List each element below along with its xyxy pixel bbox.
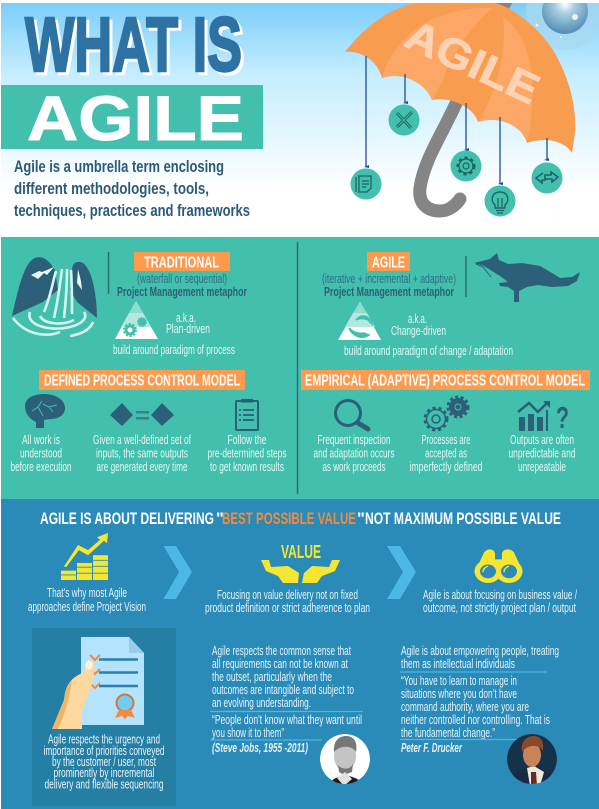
heading: best possible value: " — [357, 510, 365, 528]
hanging icon: tools — [388, 74, 420, 136]
text: agile subtitle: Project Management metaphor — [324, 285, 454, 299]
text: common sense column: the outset, particularly when the — [212, 670, 332, 684]
text: change-driven: build around paradigm of change / adaptation — [344, 344, 513, 358]
banner: defined process — [39, 370, 245, 390]
text: business value — [423, 588, 577, 615]
icon: value hands: VALUE — [281, 542, 321, 562]
text: common sense column: Agile respects the common sense that — [212, 644, 351, 658]
intro text: Agile is a umbrella term enclosing — [14, 157, 224, 176]
text: frequent inspection — [314, 433, 394, 474]
hanging icon: gear — [450, 103, 482, 182]
text: value delivery — [205, 588, 370, 615]
text: follow the steps — [208, 433, 286, 474]
text: plan-driven: Plan-driven — [166, 322, 210, 336]
text: project vision — [28, 586, 146, 614]
title: what is: WHAT IS — [25, 2, 242, 88]
text: frequent inspection: as work proceeds — [322, 460, 386, 474]
text: plan-driven: a.k.a. — [176, 311, 196, 325]
icon: hand — [52, 660, 95, 729]
text: project vision: approaches define Project Vision — [28, 600, 146, 614]
label: agile: AGILE — [372, 254, 405, 272]
text: agile subtitle: (iterative + incremental + adaptive) — [322, 272, 456, 286]
icon: waterfall — [12, 257, 97, 336]
text: empowering people column: Peter F. Drucker — [401, 741, 463, 755]
intro text: techniques, practices and frameworks — [14, 201, 250, 220]
text: empowering people column: situations where you don’t have — [401, 687, 517, 701]
label: traditional: TRADITIONAL — [144, 254, 219, 272]
umbrella label: AGILE — [398, 11, 547, 113]
text: follow the steps: to get known results — [210, 460, 284, 474]
text: priorities: by the customer / user, most — [52, 755, 156, 769]
intro text: different methodologies, tools, — [14, 179, 209, 198]
canopy light panel left — [382, 8, 493, 100]
hanging icon: document — [350, 56, 382, 200]
text: unpredictable outputs — [508, 433, 576, 474]
hanging icon: light bulb — [484, 117, 516, 216]
umbrella top stub — [496, 3, 512, 9]
icon: equal diamonds — [110, 403, 174, 426]
text: common sense column: (Steve Jobs, 1955 -2011) — [212, 741, 308, 755]
text: value delivery: product definition or strict adherence to plan — [205, 601, 370, 615]
intro text — [14, 157, 250, 220]
icon: plan-driven triangle — [115, 301, 158, 339]
label: traditional — [134, 252, 230, 272]
icon: money chart — [61, 533, 108, 580]
heading: best possible value: " — [216, 510, 224, 528]
panel: priorities — [32, 628, 176, 806]
panel: comparison — [1, 237, 599, 499]
canopy light panel right — [478, 17, 533, 143]
text: priorities: prominently by incremental — [54, 766, 154, 780]
text: empowering people column: the fundamental change.” — [401, 726, 495, 740]
icon: clipboard — [236, 399, 258, 430]
header panel — [1, 0, 599, 236]
text: priorities — [44, 732, 165, 792]
text: common sense column: “People don't know what they want until — [212, 713, 362, 727]
text: traditional subtitle: (waterfall or sequential) — [137, 272, 227, 286]
text: plan-driven: build around paradigm of process — [113, 343, 235, 357]
heading: best possible value — [40, 510, 561, 528]
icon: chart with question mark: ? — [556, 400, 569, 435]
photo: peter drucker — [507, 734, 558, 786]
icon: binoculars — [474, 549, 522, 583]
text: common sense column: all requirements can not be known at — [212, 657, 348, 671]
hanging icon: arrows — [532, 138, 562, 194]
text: agile subtitle — [322, 272, 456, 299]
icon: disco sphere — [526, 0, 599, 50]
text: empowering people column — [400, 644, 559, 755]
text: change-driven — [344, 312, 513, 358]
text: well-defined inputs: inputs, the same outputs — [96, 446, 188, 460]
text: all work understood: before execution — [10, 460, 72, 474]
heading: best possible value: AGILE IS ABOUT DELIVERING — [40, 510, 214, 528]
text: value delivery: Focusing on value delivery not on fixed — [217, 588, 358, 602]
text: common sense column — [210, 644, 363, 755]
label: agile — [367, 252, 410, 272]
text: imperfectly defined: Processes are — [422, 433, 471, 447]
text: traditional subtitle — [117, 272, 247, 299]
icon: magnifier — [336, 400, 368, 429]
icon: agile umbrella — [345, 0, 575, 211]
heading: best possible value: BEST POSSIBLE VALUE — [222, 510, 356, 528]
umbrella handle — [420, 97, 460, 211]
text: well-defined inputs — [93, 433, 191, 474]
text: follow the steps: Follow the — [228, 433, 267, 447]
text: common sense column: you show it to them” — [212, 726, 284, 740]
title: what is — [25, 2, 245, 91]
text: change-driven: Change-driven — [391, 324, 446, 338]
text: frequent inspection: and adaptation occurs — [314, 446, 394, 460]
text: unpredictable outputs: unrepeatable — [518, 460, 566, 474]
text: traditional subtitle: Project Management metaphor — [117, 285, 247, 299]
icon: fox — [474, 253, 580, 302]
panel: value — [1, 499, 599, 809]
text: priorities: importance of priorities conveyed — [44, 744, 165, 758]
icon: change-driven triangle — [338, 302, 381, 340]
text: imperfectly defined — [410, 433, 483, 474]
text: common sense column: outcomes are intangible and subject to — [212, 683, 354, 697]
text: empowering people column: them as intellectual individuals — [401, 657, 515, 671]
umbrella canopy — [345, 3, 575, 153]
text: all work understood: understood — [20, 446, 62, 460]
icon: checklist document — [81, 637, 144, 725]
icon: brain — [25, 394, 65, 428]
arrow: chevron one — [164, 546, 192, 599]
text: imperfectly defined: imperfectly defined — [410, 460, 483, 474]
banner: defined process: DEFINED PROCESS CONTROL MODEL — [44, 372, 240, 390]
arrow: chevron two — [387, 546, 416, 599]
text: project vision: That's why most Agile — [47, 586, 127, 600]
text: empowering people column: “You have to learn to manage in — [401, 674, 517, 688]
title: what is: WHAT IS — [28, 5, 245, 91]
text: frequent inspection: Frequent inspection — [318, 433, 391, 447]
text: empowering people column: command authority, where you are — [401, 700, 529, 714]
text: imperfectly defined: accepted as — [425, 446, 467, 460]
title: agile banner: AGILE — [27, 84, 244, 154]
icon: gears — [425, 397, 468, 430]
icon: chart with question mark — [518, 400, 569, 435]
text: priorities: delivery and flexible sequencing — [44, 778, 164, 792]
text: priorities: Agile respects the urgency and — [48, 732, 160, 746]
text: follow the steps: pre-determined steps — [208, 446, 286, 460]
text: all work understood — [10, 433, 72, 474]
text: plan-driven — [113, 311, 235, 357]
photo: steve jobs — [320, 734, 370, 786]
text: common sense column: an evolving understanding. — [212, 696, 311, 710]
text: well-defined inputs: Given a well-defined set of — [93, 433, 191, 447]
text: change-driven: a.k.a. — [408, 312, 427, 326]
text: well-defined inputs: are generated every time — [96, 460, 188, 474]
icon: value hands — [261, 542, 340, 583]
text: all work understood: All work is — [22, 433, 60, 447]
